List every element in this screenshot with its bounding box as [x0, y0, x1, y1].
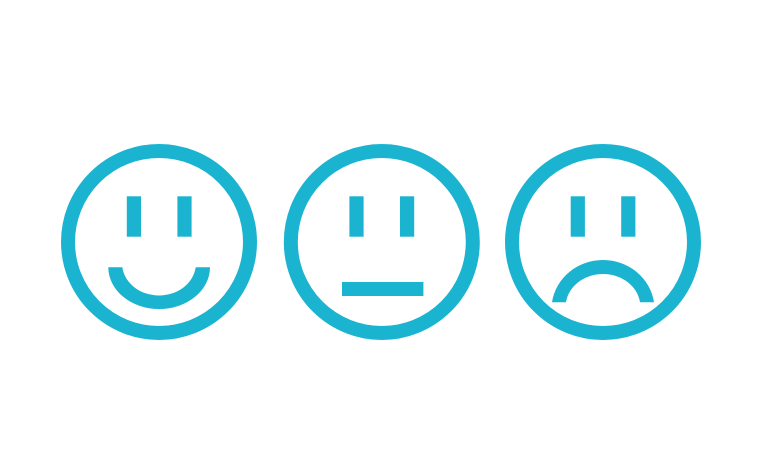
sad face left eye — [571, 196, 585, 237]
icon: happy face — [68, 151, 250, 333]
sad face frown — [552, 260, 654, 302]
icon: neutral face — [291, 151, 473, 333]
neutral face left eye — [349, 196, 364, 237]
neutral face right eye — [400, 196, 414, 237]
neutral face outline — [291, 151, 473, 333]
icon: sad face — [512, 151, 694, 333]
happy face left eye — [127, 196, 141, 237]
happy face outline — [68, 151, 250, 333]
sad face outline — [512, 151, 694, 333]
happy face right eye — [177, 196, 192, 237]
happy face smile — [108, 267, 210, 309]
neutral face straight mouth — [342, 282, 423, 296]
sad face right eye — [621, 196, 635, 237]
